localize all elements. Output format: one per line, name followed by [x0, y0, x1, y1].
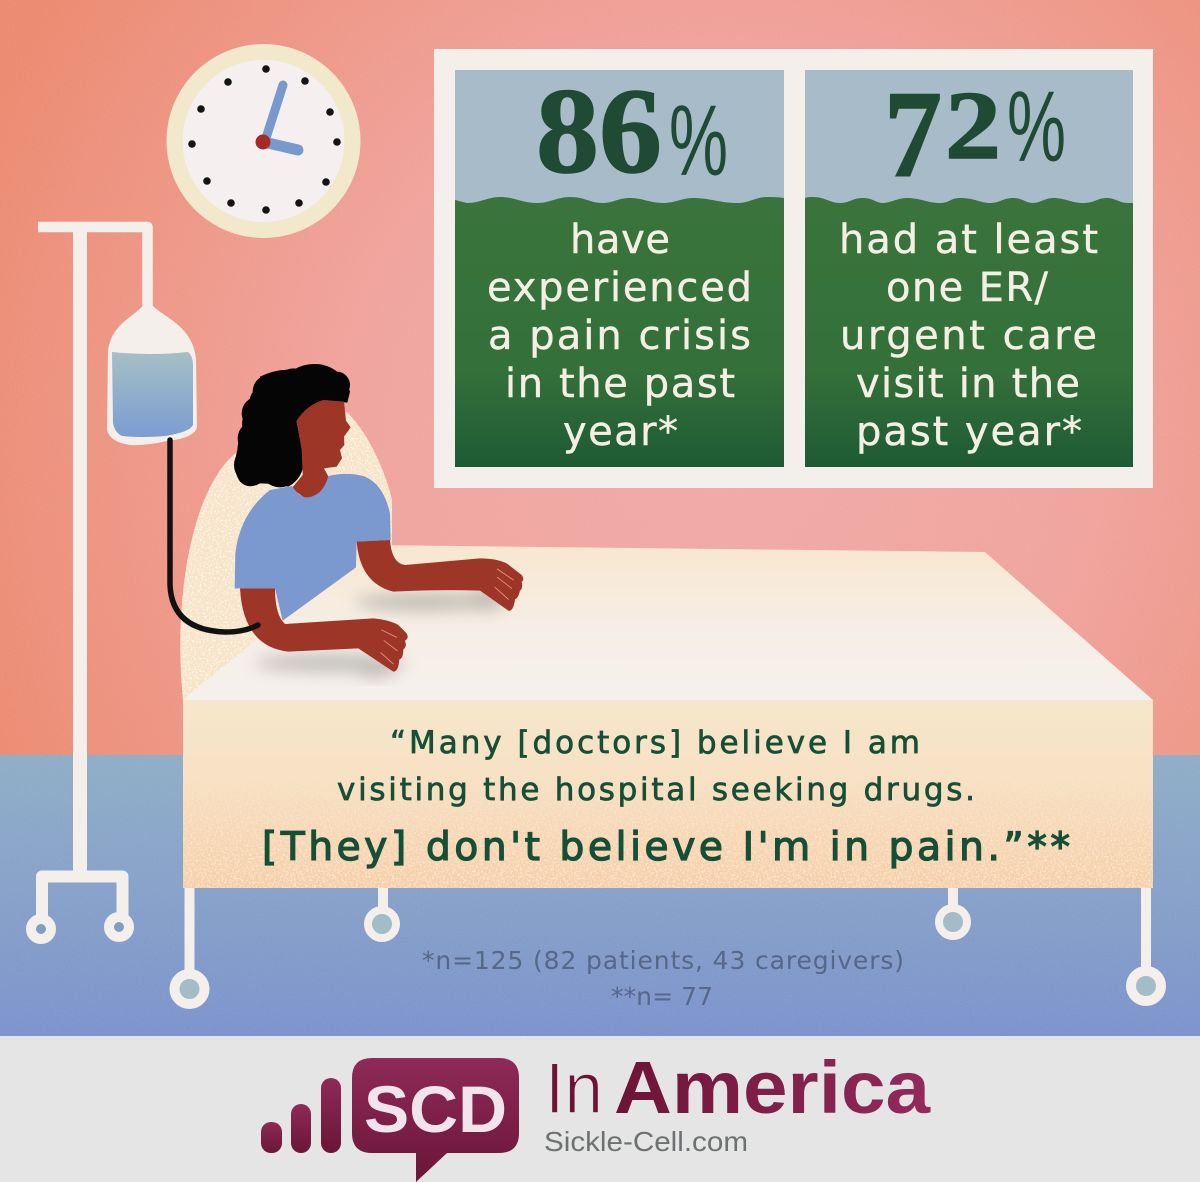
- IV pole: [31, 227, 148, 939]
- footnotes: **n= 77: [611, 982, 713, 1011]
- patient head and hair: [234, 364, 351, 499]
- caption: ER visits: urgent care: [840, 313, 1097, 359]
- caption: pain crisis: have: [570, 217, 670, 263]
- statistic 86%: 86: [536, 64, 662, 199]
- statistic 72%: 2: [945, 72, 1001, 180]
- caption: ER visits: had at least: [839, 217, 1098, 263]
- floor: [0, 755, 1200, 1036]
- wall clock: [166, 44, 360, 238]
- logo Sickle-Cell.com: Sickle-Cell.com: [544, 1126, 748, 1157]
- wall background: [0, 0, 1200, 760]
- patient quote: [They] don't believe I'm in pain.”**: [262, 825, 1070, 870]
- logo America: America: [614, 1046, 931, 1129]
- hair: [234, 364, 350, 487]
- arm shadows: [255, 590, 505, 677]
- right window pane: 72%: [805, 66, 1133, 467]
- logo signal bars: [261, 1078, 341, 1153]
- caption: pain crisis: year*: [563, 409, 678, 455]
- patient quote: visiting the hospital seeking drugs.: [337, 772, 975, 808]
- caption: pain crisis: a pain crisis: [488, 313, 751, 359]
- caption: ER visits: one ER/: [886, 265, 1049, 311]
- window frame: [434, 49, 1153, 488]
- footnotes: *n=125 (82 patients, 43 caregivers): [422, 946, 904, 975]
- caption: pain crisis: in the past: [505, 361, 735, 407]
- logo In: In: [545, 1049, 603, 1129]
- left window pane: 86%: %: [669, 85, 728, 197]
- IV tube: [170, 440, 258, 632]
- caption: ER visits: past year*: [856, 409, 1082, 455]
- far arm: [357, 540, 523, 611]
- left window pane: 86%: [455, 64, 784, 467]
- logo: SCD In America: [261, 1046, 931, 1182]
- patient gown and arms: [235, 474, 523, 672]
- IV bag: [107, 306, 197, 445]
- caption: ER visits: visit in the: [856, 361, 1080, 407]
- gown: [235, 474, 391, 621]
- face and neck: [292, 400, 351, 499]
- caption: pain crisis: experienced: [487, 265, 752, 311]
- bed legs and wheels: [174, 885, 1161, 1004]
- right window pane: 72%: %: [1007, 71, 1066, 183]
- near arm: [240, 588, 408, 672]
- mattress top: [183, 545, 1153, 700]
- mattress front: [183, 700, 1153, 888]
- statistic 72%: 7: [884, 66, 942, 203]
- finger lines: [381, 569, 513, 664]
- footer band: [0, 1036, 1200, 1182]
- clock hands: [266, 85, 298, 150]
- logo speech bubble: [352, 1058, 519, 1182]
- patient quote: “Many [doctors] believe I am: [390, 725, 920, 761]
- logo SCD: SCD: [364, 1072, 507, 1146]
- headboard: [180, 412, 392, 700]
